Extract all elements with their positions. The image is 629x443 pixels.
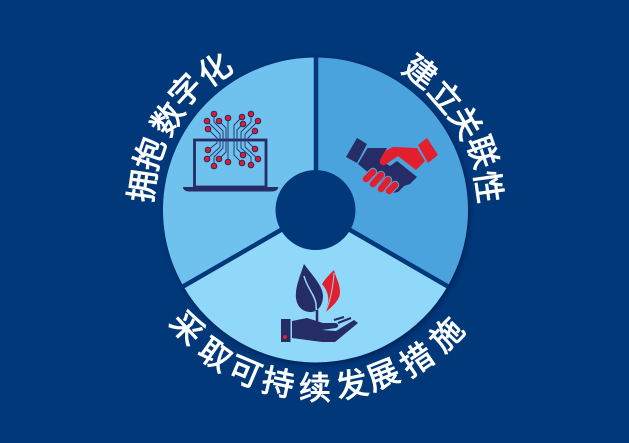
label: build connectivity: 关: [441, 100, 489, 146]
label: adopt sustainable measures: 可: [223, 349, 267, 395]
label: embrace digitalisation: 化: [192, 46, 238, 94]
label: embrace digitalisation: [123, 46, 238, 204]
label: adopt sustainable measures: [163, 304, 471, 406]
hand: [292, 318, 358, 342]
icon: plant in hand: [281, 264, 358, 342]
label: adopt sustainable measures: 施: [423, 311, 471, 359]
label: adopt sustainable measures: 展: [361, 352, 405, 398]
label: adopt sustainable measures: 取: [192, 331, 238, 379]
label: build connectivity: 性: [468, 169, 508, 205]
donut wheel: [163, 57, 470, 365]
segment: digital: [163, 58, 316, 286]
stem: [304, 276, 317, 322]
label: embrace digitalisation: 数: [144, 96, 192, 142]
icon: laptop with circuit: [183, 111, 278, 192]
label: adopt sustainable measures: 持: [259, 362, 297, 404]
segment: connectivity: [316, 58, 468, 286]
navy leaf: [296, 264, 323, 312]
label: build connectivity: 立: [421, 73, 469, 121]
cuff: [281, 319, 290, 342]
label: build connectivity: 联: [460, 131, 504, 173]
red leaf: [322, 270, 340, 313]
label: adopt sustainable measures: 采: [163, 304, 211, 352]
label: build connectivity: 建: [396, 48, 444, 96]
label: embrace digitalisation: 拥: [123, 168, 163, 204]
divider lines: [183, 57, 448, 286]
label: embrace digitalisation: 抱: [128, 133, 172, 175]
label: embrace digitalisation: 字: [162, 67, 210, 115]
label: adopt sustainable measures: 发: [333, 364, 371, 406]
label: adopt sustainable measures: 续: [299, 370, 331, 406]
label: build connectivity: [396, 48, 508, 205]
icon: handshake: [346, 138, 438, 193]
segment: sustainability: [183, 210, 448, 363]
label: adopt sustainable measures: 措: [394, 336, 440, 384]
centre hole: [276, 170, 356, 250]
